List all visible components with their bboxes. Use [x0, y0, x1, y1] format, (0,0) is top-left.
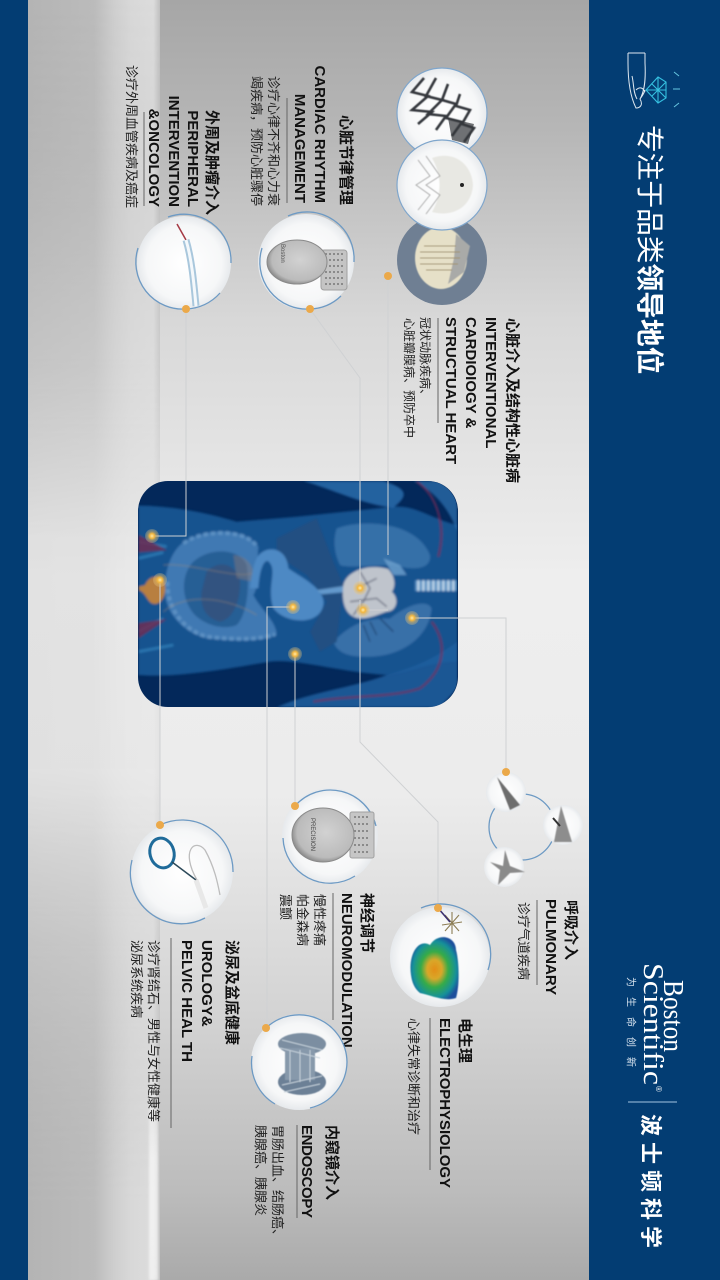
- icon: neurostimulator: PRECISION: [309, 818, 315, 851]
- english title: ENDOSCOPY: [298, 1125, 315, 1218]
- description: 帕金森病: [295, 894, 310, 946]
- english title: [291, 66, 328, 203]
- connector lines: [152, 276, 506, 1028]
- description: 诊疗肾结石、男性与女性健康等: [146, 940, 161, 1122]
- icon: endoscopic stent: [251, 1014, 347, 1110]
- heading: 电生理: [456, 1018, 473, 1063]
- heading: 专注于品类领导地位: 专注于品类: [634, 125, 665, 263]
- description: 诊疗外周血管疾病及癌症: [124, 65, 139, 208]
- english title: MANAGEMENT: [291, 94, 308, 203]
- icon: balloon catheter: [136, 214, 231, 313]
- icon: urology device: [130, 820, 233, 924]
- english title: STRUCTUAL HEART: [442, 317, 459, 464]
- icon: heart map: [390, 904, 491, 1007]
- body silhouette: [138, 481, 457, 707]
- logo: Boston Scientific: Scientific: [637, 963, 669, 1085]
- heading: 专注于品类领导地位: [634, 125, 665, 374]
- description: 泌尿系统疾病: [129, 940, 144, 1018]
- trachea: [415, 580, 457, 591]
- icon: pacemaker: [258, 212, 354, 313]
- bladder: [138, 577, 165, 604]
- icon: pulmonary tools: [484, 768, 583, 887]
- heading: 心脏节律管理: [337, 115, 355, 205]
- icon: hand holding diamond: [628, 53, 680, 108]
- heading: 专注于品类领导地位: 领导地位: [634, 264, 665, 374]
- description: 震颤: [278, 894, 293, 920]
- stomach: [250, 549, 324, 620]
- heading: 呼吸介入: [562, 900, 579, 960]
- icon: neurostimulator: [282, 788, 378, 884]
- heading: 心脏介入及结构性心脏病: [504, 318, 522, 483]
- panel: peripheral intervention and oncology: [124, 65, 231, 313]
- brand name: 波士顿科学: 波士顿科学: [638, 1114, 663, 1254]
- description: [129, 940, 161, 1122]
- english title: PELVIC HEAL TH: [178, 940, 195, 1062]
- panel: neuromodulation: [278, 788, 378, 1048]
- icon: pacemaker: Boston: [279, 244, 285, 263]
- heading: 神经调节: [358, 893, 376, 953]
- english title: &ONCOLOGY: [145, 109, 162, 207]
- icon: occluder photo: [397, 215, 487, 305]
- description: 竭疾病，预防心脏骤停: [249, 76, 264, 206]
- panel: pulmonary: [484, 768, 583, 995]
- description: 胰腺癌、胰腺炎: [253, 1125, 268, 1216]
- icon: stent photo: [397, 68, 487, 158]
- english title: INTERVENTIONAL: [482, 317, 499, 448]
- colon and intestines: [163, 531, 277, 641]
- right navy band: [589, 0, 720, 1280]
- description: 心律失常诊断和治疗: [406, 1018, 421, 1135]
- english title: INTERVENTION: [165, 96, 182, 207]
- description: 诊疗心律不齐和心力衰: [266, 76, 281, 206]
- dot: [384, 272, 392, 280]
- anatomy panel: [138, 481, 458, 707]
- heading: 外周及肿瘤介入: [203, 110, 221, 215]
- description: 胃肠出血、结肠癌、: [270, 1125, 285, 1242]
- panel: electrophysiology: [390, 904, 491, 1188]
- panel: urology and pelvic health: [129, 820, 241, 1128]
- description: 诊疗气道疾病: [516, 902, 531, 980]
- english title: [178, 940, 215, 1062]
- english title: CARDIAC RHYTHM: [311, 66, 328, 203]
- description: [253, 1125, 285, 1242]
- heart: [343, 558, 407, 642]
- lungs and liver: [277, 518, 432, 657]
- english title: CARDIOIOGY &: [462, 317, 479, 429]
- description: [402, 317, 433, 438]
- logo: Boston Scientific: 为生命创新: [624, 977, 638, 1077]
- english title: [145, 96, 201, 207]
- english title: ELECTROPHYSIOLOGY: [436, 1018, 453, 1188]
- icon: valve photo: [397, 140, 487, 230]
- description: 冠状动脉疾病、: [418, 317, 433, 401]
- panel: cardiac rhythm management: [249, 66, 355, 313]
- english title: UROLOGY&: [198, 940, 215, 1027]
- english title: [442, 317, 499, 464]
- description: 慢性疼痛: [312, 894, 327, 946]
- panel: interventional cardiology: [384, 68, 522, 483]
- anatomy marker dots: [145, 529, 419, 661]
- description: [249, 76, 281, 206]
- logo: Boston Scientific: ®: [654, 1086, 663, 1092]
- description: [278, 894, 327, 946]
- english title: NEUROMODULATION: [338, 893, 355, 1048]
- logo: Boston Scientific: [624, 963, 689, 1092]
- silver background: [28, 0, 589, 1280]
- logo: Boston Scientific: Boston: [657, 980, 689, 1052]
- english title: PERIPHERAL: [184, 110, 201, 207]
- heading: 泌尿及盆底健康: [223, 940, 241, 1045]
- panel: endoscopy: [251, 1014, 347, 1242]
- english title: PULMONARY: [542, 899, 559, 995]
- description: 心脏瓣膜病、预防卒中: [402, 318, 417, 438]
- left navy band: [0, 0, 28, 1280]
- heading: 内窥镜介入: [323, 1125, 341, 1200]
